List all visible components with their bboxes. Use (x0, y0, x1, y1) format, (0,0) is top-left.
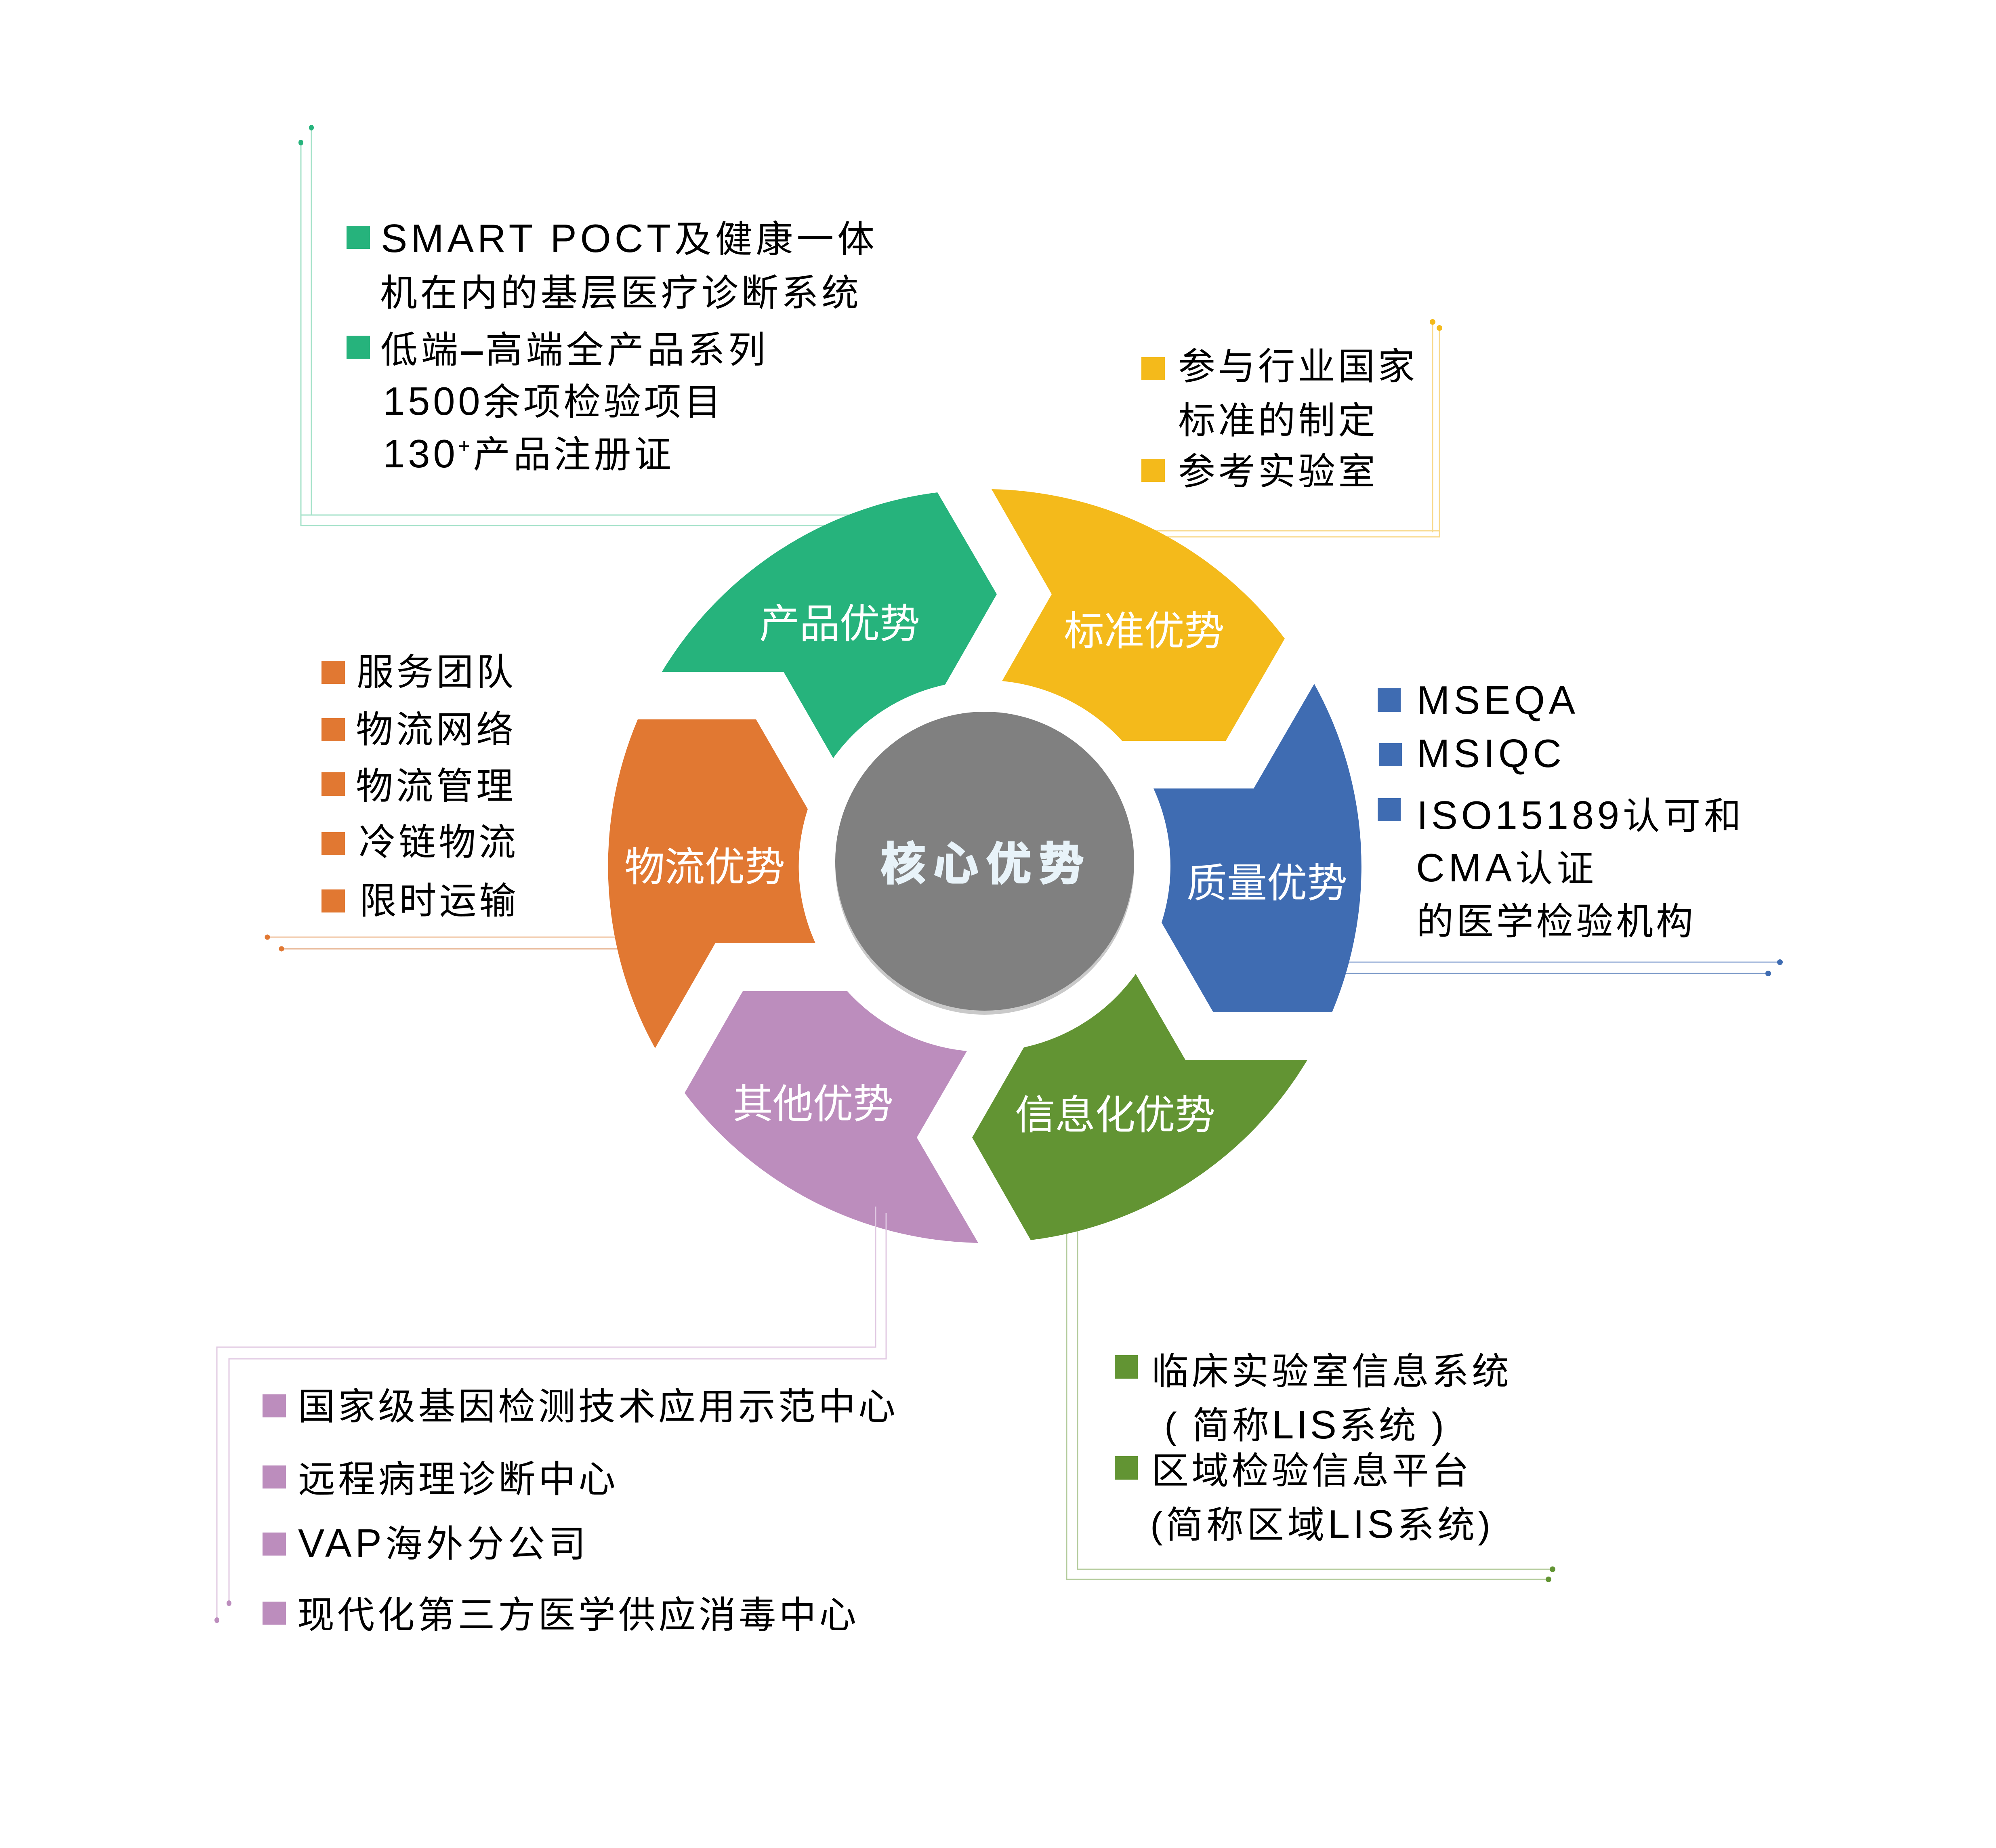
list: standard advantage: 参考实验室 (1178, 451, 1375, 492)
list: logistics advantage: 物流网络 (356, 709, 513, 751)
connector: other (214, 1207, 886, 1623)
list: standard advantage (1141, 346, 1415, 492)
list: logistics advantage: 服务团队 (357, 652, 513, 693)
segment: product advantage (662, 492, 997, 758)
list: logistics advantage: 限时运输 (359, 881, 516, 922)
list: other advantage: 国家级基因检测技术应用示范中心 (298, 1386, 895, 1428)
list: information advantage: 区域检验信息平台 (1151, 1451, 1469, 1492)
connector: information (1067, 1212, 1555, 1582)
centre circle: core advantage: 核心优势 (880, 839, 1084, 889)
centre circle: core advantage (835, 712, 1134, 1015)
list: quality advantage: MSIQC (1417, 731, 1561, 776)
list: other advantage: 现代化第三方医学供应消毒中心 (297, 1595, 856, 1636)
list: logistics advantage: 冷链物流 (359, 822, 516, 863)
list: standard advantage: 参与行业国家 (1178, 346, 1415, 387)
segment: standard advantage (992, 489, 1285, 741)
connector: quality (1333, 959, 1783, 976)
list: quality advantage: CMA认证 (1416, 845, 1594, 890)
connector: product (298, 125, 889, 526)
list: information advantage (1115, 1351, 1509, 1546)
list: logistics advantage (321, 652, 516, 922)
connector: logistics (265, 935, 646, 952)
list: information advantage: (简称区域LIS系统) (1150, 1502, 1490, 1546)
segment: quality advantage: 质量优势 (1187, 861, 1347, 906)
segment: quality advantage (1153, 684, 1361, 1012)
list: product advantage: 低端–高端全产品系列 (380, 330, 765, 371)
list: quality advantage: 的医学检验机构 (1416, 901, 1693, 942)
segment: logistics advantage (608, 719, 815, 1048)
segment: product advantage: 产品优势 (759, 601, 920, 647)
segment: standard advantage: 标准优势 (1064, 609, 1225, 654)
list: product advantage: + (458, 435, 470, 457)
list: information advantage: 临床实验室信息系统 (1151, 1351, 1509, 1392)
list: information advantage: ( 简称LIS系统 ) (1164, 1402, 1444, 1447)
connector: standard (1131, 319, 1442, 537)
list: product advantage (347, 216, 874, 476)
list: logistics advantage: 物流管理 (356, 766, 513, 807)
list: standard advantage: 标准的制定 (1178, 400, 1375, 442)
list: product advantage: 产品注册证 (473, 434, 671, 475)
list: product advantage: SMART POCT及健康一体 (381, 216, 874, 261)
segment: other advantage (685, 991, 978, 1243)
list: product advantage: 1500余项检验项目 (383, 379, 721, 423)
list: quality advantage: MSEQA (1417, 678, 1576, 722)
list: quality advantage (1378, 678, 1741, 942)
segment: information advantage: 信息化优势 (1015, 1093, 1215, 1138)
list: quality advantage: ISO15189认可和 (1417, 793, 1741, 837)
list: product advantage: 机在内的基层医疗诊断系统 (380, 273, 859, 314)
segment: other advantage: 其他优势 (733, 1082, 893, 1127)
list: product advantage: 130 (383, 431, 455, 476)
segment: logistics advantage: 物流优势 (624, 845, 785, 890)
list: other advantage: VAP海外分公司 (298, 1521, 586, 1565)
segment: information advantage (972, 974, 1307, 1240)
list: other advantage (263, 1386, 895, 1636)
list: other advantage: 远程病理诊断中心 (298, 1459, 616, 1500)
